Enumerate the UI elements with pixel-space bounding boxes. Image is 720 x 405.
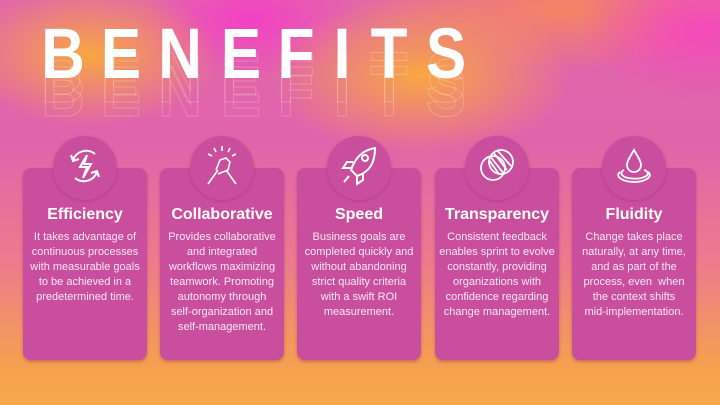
panel: efficiency bbox=[22, 136, 148, 364]
title: B bbox=[41, 15, 85, 94]
text: collaborative: and integrated bbox=[187, 246, 257, 258]
title: F bbox=[278, 15, 314, 94]
title bbox=[41, 15, 466, 94]
icon: handshake bbox=[190, 136, 254, 200]
panel: transparency bbox=[434, 136, 560, 364]
text: speed: with a swift ROI bbox=[321, 291, 397, 303]
text: speed bbox=[305, 231, 413, 318]
text: fluidity: mid-implementation. bbox=[584, 306, 684, 318]
icon: water drop bbox=[602, 136, 666, 200]
title: E bbox=[221, 15, 261, 94]
text: efficiency: predetermined time. bbox=[36, 291, 134, 303]
text: fluidity: the context shifts bbox=[593, 291, 675, 303]
text: transparency: confidence regarding bbox=[446, 291, 548, 303]
text: transparency: constantly, providing bbox=[447, 261, 547, 273]
text: speed: measurement. bbox=[324, 306, 394, 318]
text: fluidity bbox=[582, 231, 686, 318]
text: fluidity: Change takes place bbox=[585, 231, 683, 243]
text: speed: Business goals are bbox=[313, 231, 405, 243]
title: I bbox=[334, 15, 350, 94]
text: collaborative: teamwork. Promoting bbox=[170, 276, 274, 288]
text: efficiency: to be achieved in a bbox=[39, 276, 131, 288]
panel: collaborative bbox=[158, 136, 286, 364]
text: collaborative: self-organization and bbox=[171, 306, 273, 318]
text: efficiency bbox=[30, 231, 140, 303]
text: transparency: organizations with bbox=[453, 276, 541, 288]
text: collaborative: Provides collaborative bbox=[168, 231, 276, 243]
icon: rocket bbox=[327, 136, 391, 200]
icon: lightning cycle bbox=[53, 136, 117, 200]
text: speed: completed quickly and bbox=[305, 246, 413, 258]
text: speed: without abandoning bbox=[311, 261, 407, 273]
text: transparency: Consistent feedback bbox=[447, 231, 547, 243]
text: efficiency: with measurable goals bbox=[30, 261, 140, 273]
icon: overlapping circles bbox=[465, 136, 529, 200]
heading: speed: Speed bbox=[335, 206, 383, 223]
panel: fluidity bbox=[570, 136, 698, 364]
text: speed: strict quality criteria bbox=[312, 276, 406, 288]
text: transparency: enables sprint to evolve bbox=[439, 246, 555, 258]
text: fluidity: naturally, at any time, bbox=[582, 246, 686, 258]
text: transparency bbox=[439, 231, 555, 318]
text: efficiency: continuous processes bbox=[32, 246, 138, 258]
panel: speed bbox=[296, 136, 422, 364]
text: transparency: change management. bbox=[444, 306, 550, 318]
text: fluidity: process, even when bbox=[584, 276, 684, 288]
text: collaborative: workflows maximizing bbox=[169, 261, 275, 273]
title: E bbox=[101, 15, 141, 94]
title: S bbox=[426, 15, 466, 94]
text: collaborative: autonomy through bbox=[178, 291, 266, 303]
title reflection bbox=[44, 52, 464, 117]
heading: collaborative: Collaborative bbox=[171, 206, 273, 223]
text: fluidity: and as part of the bbox=[591, 261, 677, 273]
text: collaborative: self-management. bbox=[178, 321, 266, 333]
title: N bbox=[158, 15, 202, 94]
heading: transparency: Transparency bbox=[445, 206, 549, 223]
text: collaborative bbox=[168, 231, 276, 333]
heading: fluidity: Fluidity bbox=[606, 206, 662, 223]
title: T bbox=[371, 15, 407, 94]
heading: efficiency: Efficiency bbox=[47, 206, 123, 223]
text: efficiency: It takes advantage of bbox=[34, 231, 136, 243]
